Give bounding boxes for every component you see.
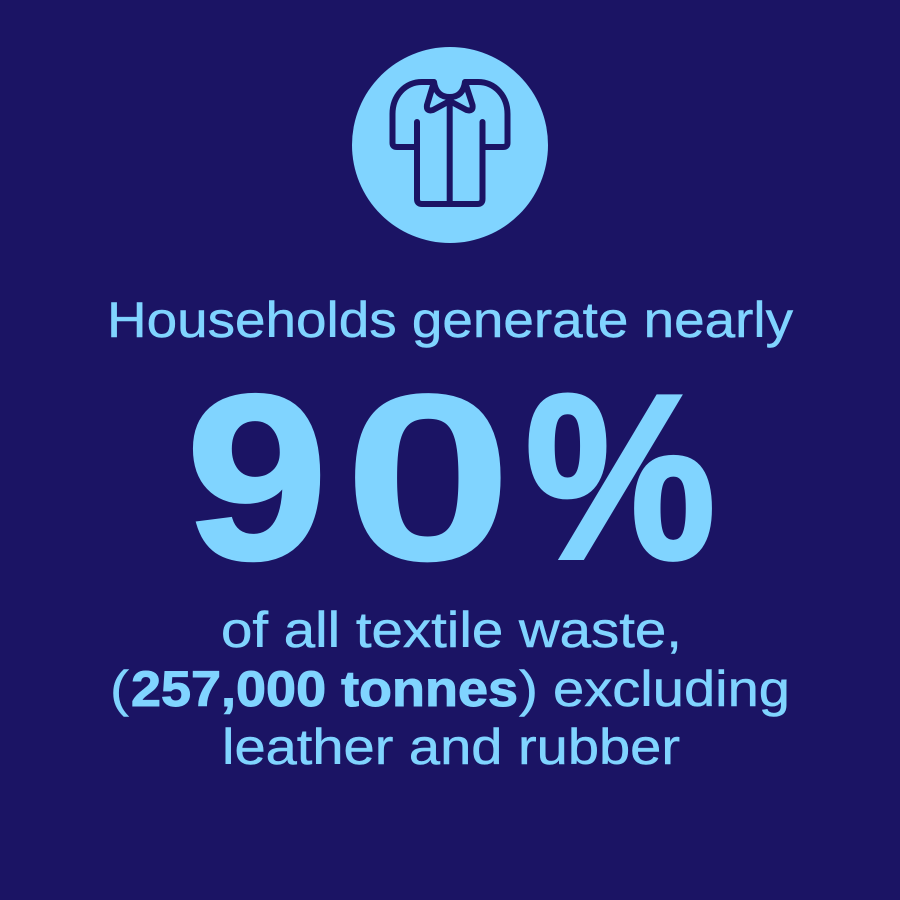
description text: excluding — [553, 661, 790, 717]
big statistic: % — [525, 345, 716, 608]
description text: of all textile waste, — [221, 602, 682, 658]
description text: ( — [110, 661, 129, 717]
description text: ) — [519, 661, 538, 717]
big statistic: 0 — [343, 345, 513, 611]
big statistic — [186, 345, 716, 611]
big statistic: 9 — [186, 347, 328, 609]
description text: 257,000 tonnes — [131, 661, 518, 717]
heading text: Households generate nearly — [107, 292, 793, 348]
description text — [110, 602, 790, 775]
icon: shirt in circle — [352, 47, 548, 243]
description text: leather and rubber — [222, 719, 680, 775]
